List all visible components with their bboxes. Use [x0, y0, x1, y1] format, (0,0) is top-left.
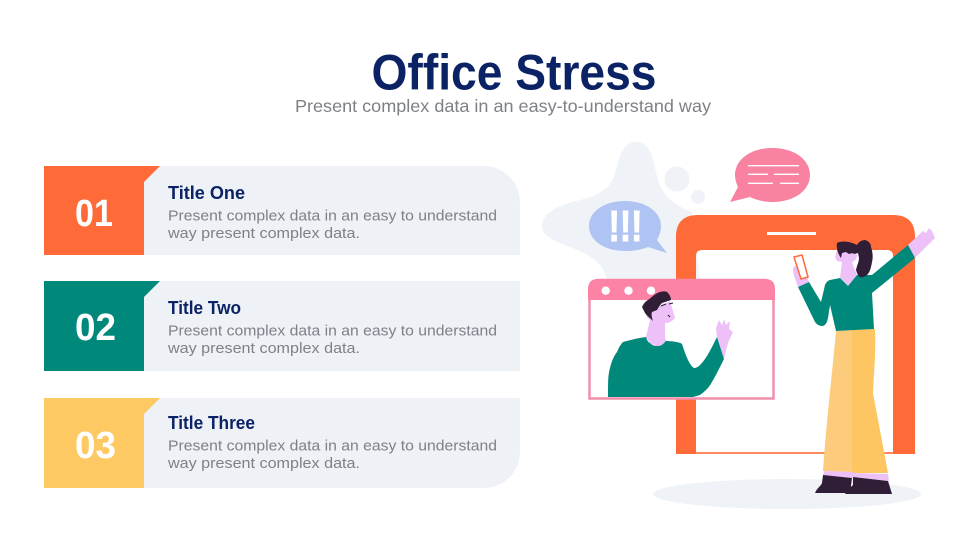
woman phone [794, 255, 808, 279]
woman sweater [798, 245, 915, 331]
title: Office Stress [372, 44, 656, 100]
thought circle large [664, 166, 690, 192]
heading: title three: Title Three [168, 413, 255, 433]
woman raised hand [908, 228, 935, 258]
subtitle: Present complex data in an easy-to-understand way [295, 96, 711, 116]
man sweater [608, 337, 724, 397]
card background 02 [144, 281, 520, 371]
heading: title two: Title Two [168, 298, 241, 318]
window dots [602, 286, 655, 295]
body text 03: way present complex data. [167, 455, 360, 472]
man skin [646, 301, 675, 347]
speech bubble: exclamation: !!! [608, 202, 642, 251]
body text 02: way present complex data. [167, 340, 360, 357]
woman holding hand [793, 262, 809, 287]
speaker line [767, 232, 816, 235]
number tab 02 [44, 281, 160, 371]
body text 01 [167, 208, 497, 242]
video call window [588, 279, 775, 398]
woman hair [837, 240, 873, 277]
man hand [716, 319, 733, 359]
illustration: office stress video call [542, 142, 935, 509]
man on call [608, 291, 733, 397]
background blob [542, 142, 700, 280]
woman shoes [815, 475, 892, 494]
woman head and neck [835, 247, 857, 286]
heading: title one: Title One [168, 183, 245, 203]
body text 01: way present complex data. [167, 225, 360, 242]
body text 02 [167, 322, 497, 357]
number 01: 01 [75, 193, 113, 235]
man hair [642, 291, 671, 321]
body text 02: Present complex data in an easy to understand [168, 322, 497, 340]
card background 01 [144, 166, 520, 255]
speech bubble: message [730, 148, 810, 202]
body text 01: Present complex data in an easy to understand [168, 208, 497, 224]
device screen frame [676, 215, 915, 454]
woman with phone [793, 228, 935, 494]
panel: item 03 [44, 398, 520, 488]
body text 03: Present complex data in an easy to understand [168, 438, 497, 454]
panel: item 01 [44, 166, 520, 255]
ground shadow [653, 479, 921, 509]
number tab 01 [44, 166, 160, 255]
woman pants left [823, 330, 852, 472]
number tab 03 [44, 398, 160, 488]
woman ankles [823, 471, 889, 481]
panel: item 02 [44, 281, 520, 371]
speech bubble: exclamation [589, 201, 667, 253]
woman pants right [852, 329, 888, 473]
number 03: 03 [75, 425, 116, 467]
thought circle small [691, 190, 705, 204]
body text 03 [167, 438, 497, 472]
number 02: 02 [75, 307, 116, 349]
card background 03 [144, 398, 520, 488]
man face details [661, 303, 673, 317]
